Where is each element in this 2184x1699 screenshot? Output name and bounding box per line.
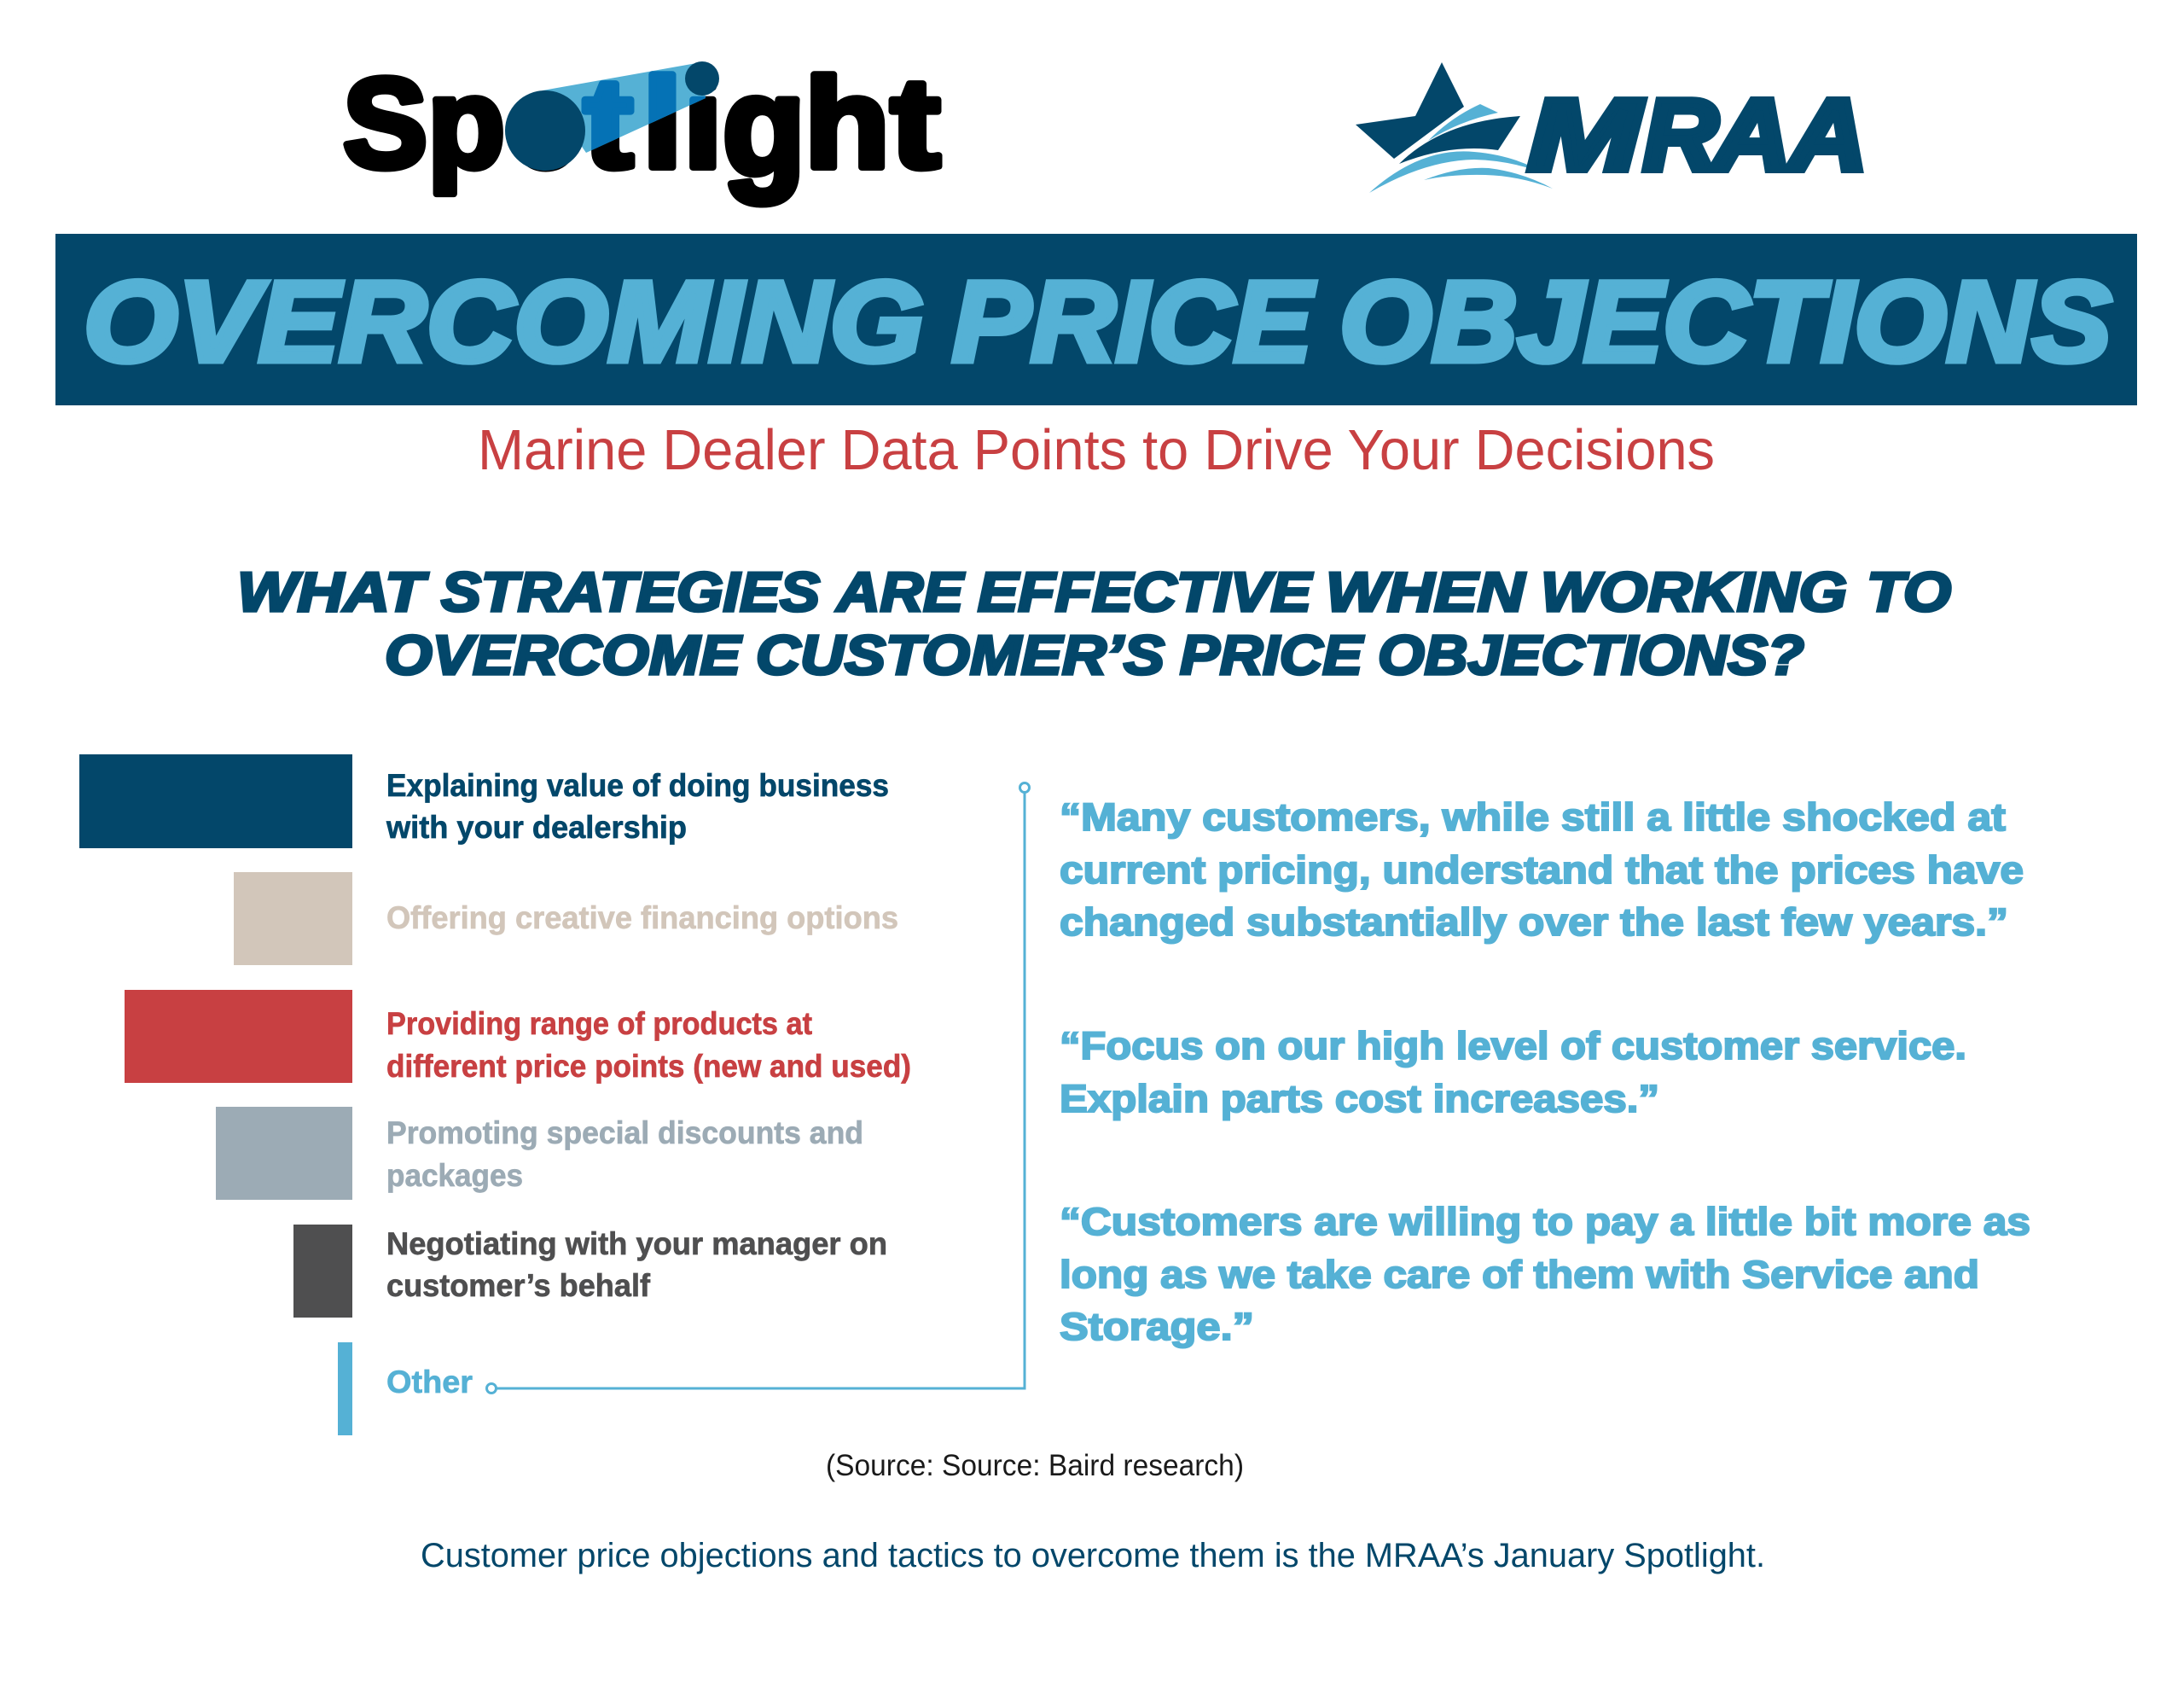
bar row: negotiating with manager: customer’s behalf (386, 1268, 651, 1303)
section heading: CUSTOMER’S (756, 624, 1165, 686)
quote one: “Many customers, while still a little shocked at (1060, 795, 2006, 839)
quote two (1060, 1024, 1966, 1120)
title banner: OBJECTIONS (1339, 259, 2111, 386)
section heading: PRICE (1180, 624, 1364, 686)
quote two: Explain parts cost increases.” (1060, 1077, 1659, 1120)
quotes (1060, 795, 2030, 1348)
bar row: explaining value: Explaining value of doing business (386, 768, 889, 803)
logo: MRAA: A (1786, 79, 1867, 192)
section heading: EFFECTIVE (978, 561, 1313, 623)
footer note: Customer price objections and tactics to overcome them is the MRAA’s January Spotlight. (421, 1537, 1765, 1574)
section heading: WORKING (1541, 561, 1847, 623)
bar chart: strategies (79, 754, 911, 1435)
quote one: current pricing, understand that the prices have (1060, 848, 2024, 892)
bar row: explaining value: with your dealership (386, 810, 687, 845)
bar row: special discounts: Promoting special discounts and (386, 1115, 863, 1150)
logo: Spotlight: o (512, 51, 580, 195)
quote three: Storage.” (1060, 1305, 1254, 1348)
logo: MRAA: R (1643, 79, 1718, 192)
logo: Spotlight: t (584, 51, 633, 195)
bar row: other (338, 1342, 473, 1435)
logo: Spotlight: l (642, 51, 682, 195)
logo: Spotlight: Sp (343, 51, 505, 195)
logo: Spotlight: t (584, 51, 633, 195)
section heading: ARE (835, 561, 965, 623)
logo: Spotlight: i (683, 51, 723, 195)
bar row: explaining value (79, 754, 889, 848)
bar row: creative financing: Offering creative financing options (386, 900, 898, 935)
logo: Spotlight: i (683, 51, 723, 195)
subtitle: Marine Dealer Data Points to Drive Your Decisions (478, 418, 1715, 482)
section heading: WHEN (1326, 561, 1526, 623)
bar row: special discounts (216, 1107, 863, 1200)
title banner: PRICE (952, 259, 1316, 386)
bar row: range of products: different price points (new and used) (386, 1049, 911, 1084)
quote one: changed substantially over the last few years.” (1060, 900, 2008, 944)
logo: Spotlight: h (804, 51, 890, 195)
quote three: long as we take care of them with Service and (1060, 1253, 1979, 1296)
logo: Spotlight: t (891, 51, 940, 195)
bar row: other: Other (386, 1364, 473, 1399)
section heading: WHAT (237, 561, 429, 623)
logo: MRAA: A (1711, 79, 1792, 192)
quote three: “Customers are willing to pay a little bit more as (1060, 1200, 2030, 1243)
logo: Spotlight: l (642, 51, 682, 195)
connector line from Other to quotes (486, 783, 1029, 1393)
logo: Spotlight: g (723, 48, 805, 205)
section heading: OBJECTIONS? (1378, 624, 1804, 686)
section heading (237, 561, 1951, 686)
title banner: OVERCOMING (84, 259, 924, 386)
source note: (Source: Source: Baird research) (826, 1449, 1244, 1482)
bar row: special discounts: packages (386, 1158, 523, 1193)
bar row: creative financing (234, 872, 898, 965)
section heading: OVERCOME (385, 624, 742, 686)
quote two: “Focus on our high level of customer service. (1060, 1024, 1966, 1068)
section heading: TO (1867, 561, 1951, 623)
section heading: STRATEGIES (441, 561, 820, 623)
bar row: negotiating with manager (293, 1225, 887, 1318)
logo: MRAA: M (1528, 79, 1644, 192)
bar row: negotiating with manager: Negotiating with your manager on (386, 1226, 887, 1261)
quote one (1060, 795, 2024, 944)
logo: Spotlight (343, 48, 940, 205)
title banner (55, 234, 2137, 405)
bar row: range of products: Providing range of products at (386, 1006, 812, 1041)
bar row: range of products (125, 990, 911, 1084)
logo: MRAA (1356, 62, 1867, 193)
quote three (1060, 1200, 2030, 1348)
